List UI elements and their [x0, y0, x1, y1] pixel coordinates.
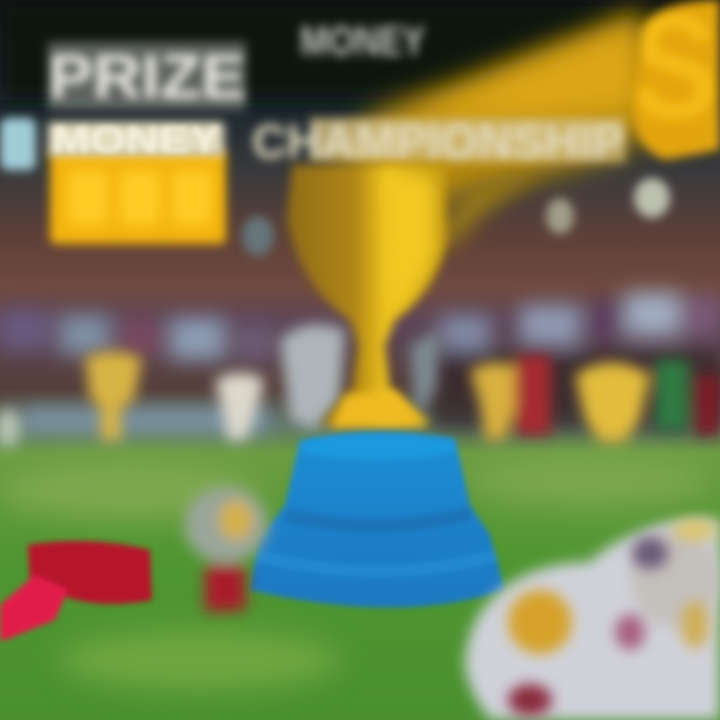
panel: yellow money box: MONEY	[52, 119, 220, 160]
small badges: pale marks under banner	[242, 178, 670, 256]
panel: yellow money box	[48, 119, 226, 244]
small ball and red figure, left of base	[184, 487, 268, 612]
side tab: pale blue, left edge	[0, 118, 36, 170]
football: large ball, lower right	[465, 519, 720, 720]
heading: championship text band: CHAMPIONSHIP	[252, 116, 624, 169]
trophy: gold cup	[287, 165, 448, 428]
ribbon: red cloth, lower left	[0, 541, 152, 640]
trophies: background row	[0, 352, 720, 448]
headline: prize text, top left: PRIZE	[48, 43, 246, 112]
trophy base: blue tiered plinth	[250, 432, 505, 608]
banner: yellow sweep toward dollar sign	[330, 10, 650, 250]
crowd band: coloured stands	[0, 292, 720, 432]
icon: silver trophy handle behind cup	[280, 324, 440, 430]
label: small text, top centre: MONEY	[300, 17, 425, 64]
